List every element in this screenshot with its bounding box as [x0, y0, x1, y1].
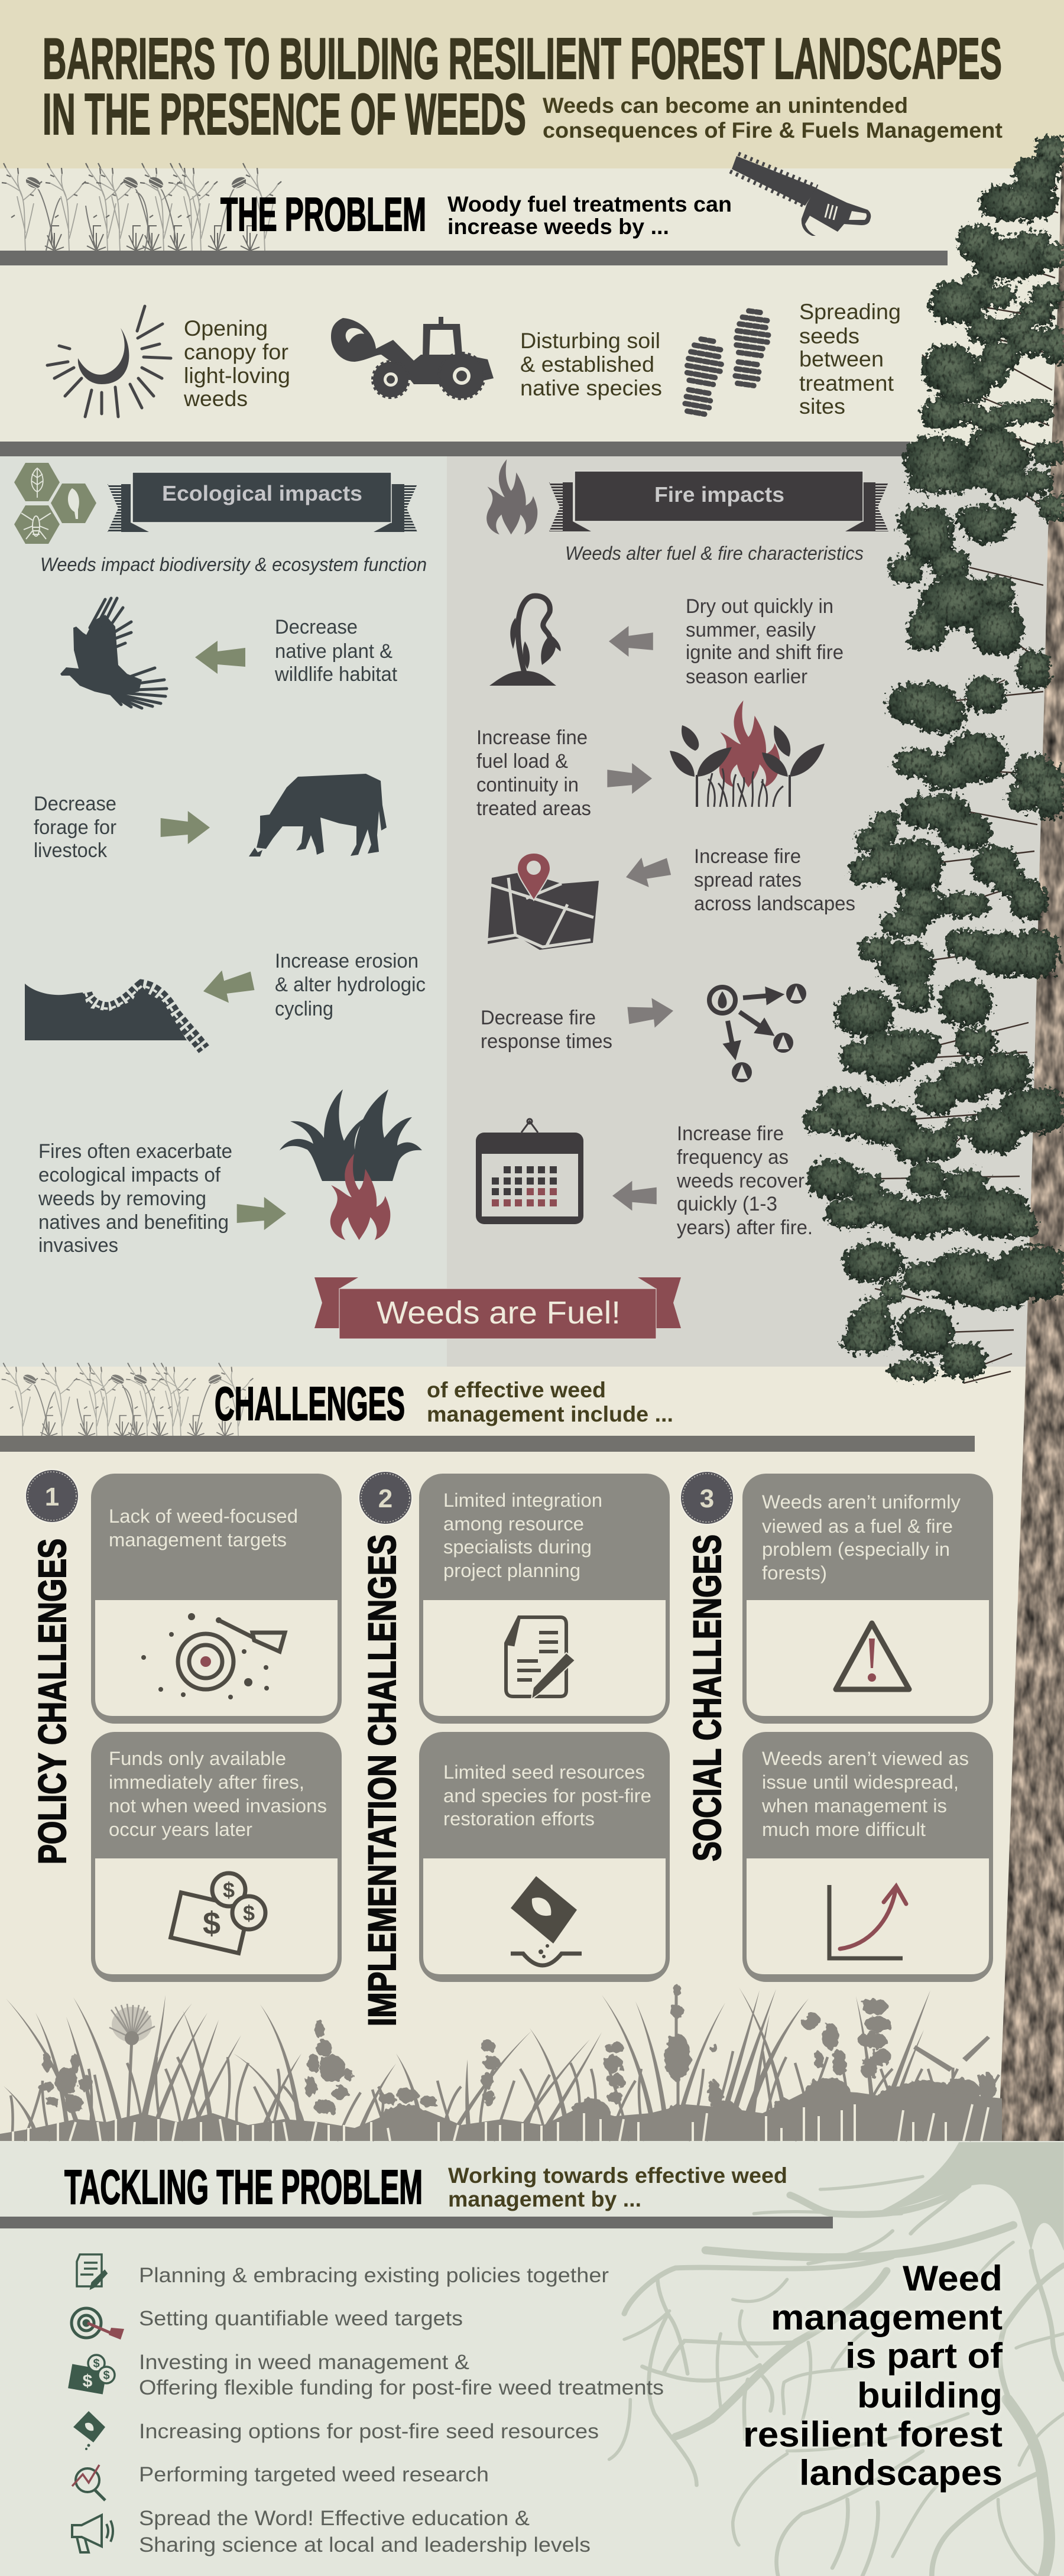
text: disturbing soil: native species	[520, 376, 662, 400]
icon: money: $	[243, 1901, 255, 1925]
arrow	[200, 965, 256, 1007]
icon: biodiversity hexagons	[14, 463, 96, 544]
tackling intro text: management by ...	[448, 2187, 641, 2211]
card: seed: Limited seed resources	[443, 1761, 645, 1783]
icon: money: $	[83, 2371, 93, 2391]
card: integration: specialists during	[443, 1536, 592, 1558]
number badge 1	[25, 1469, 79, 1523]
card: funding: not when weed invasions	[109, 1795, 327, 1816]
flowers	[38, 1985, 995, 2140]
icon: calendar	[476, 1119, 583, 1224]
column: implementation challenges	[359, 1471, 670, 2026]
tree: foliage	[809, 139, 1064, 1378]
icon: map with pin	[486, 853, 599, 950]
ribbon: weeds are fuel: Weeds are Fuel!	[377, 1295, 621, 1331]
column: social challenges	[680, 1471, 993, 1982]
icon: seed packet	[73, 2411, 105, 2450]
short blades	[11, 2051, 999, 2141]
text: fine fuel: fuel load &	[476, 750, 568, 773]
text: fine fuel	[476, 726, 591, 820]
card: integration: Limited integration	[443, 1490, 602, 1511]
divider bar	[0, 442, 910, 456]
card: funding	[91, 1732, 342, 1982]
panel: ecological impacts	[14, 463, 427, 1257]
tree roots	[609, 2142, 1064, 2576]
text: opening canopy: canopy for	[184, 340, 288, 364]
text: native habitat: Decrease	[275, 616, 358, 638]
icon: grazing cow	[249, 774, 387, 856]
text: response times: response times	[481, 1030, 612, 1053]
tree: branches	[845, 171, 1058, 1383]
text: fine fuel: Increase fine	[476, 726, 588, 749]
number badge 1: 1	[45, 1482, 59, 1511]
text: erosion: Increase erosion	[275, 950, 419, 972]
card: funding: immediately after fires,	[109, 1772, 304, 1793]
number badge 2: 2	[378, 1484, 392, 1513]
icon: plants and fire	[670, 700, 825, 807]
icon: sage grouse in flight	[60, 598, 167, 708]
icon: magnifier with trend	[72, 2465, 105, 2500]
arrow	[195, 641, 245, 674]
text: fire frequency: Increase fire	[677, 1122, 784, 1145]
icon: wilted plant	[489, 596, 561, 686]
card: perception: forests)	[762, 1562, 827, 1584]
card: perception	[742, 1474, 993, 1724]
icon: erosion hillside	[25, 984, 204, 1049]
ground silhouette	[0, 2090, 1002, 2141]
icon: fire network	[709, 984, 806, 1082]
column: policy challenges	[25, 1469, 342, 1982]
number badge 3: 3	[700, 1484, 714, 1513]
weed decoration: problem	[2, 163, 281, 251]
divider bar	[0, 1436, 975, 1452]
arrow	[607, 763, 652, 794]
ribbon: ecological impacts: Ecological impacts	[162, 481, 362, 505]
text: spreading seeds	[799, 300, 901, 418]
icon: money: $	[223, 1878, 235, 1902]
tackling intro text: Working towards effective weed	[448, 2163, 787, 2188]
icon: sun	[47, 306, 171, 417]
text: spreading seeds: treatment	[799, 371, 894, 395]
conclusion text: is part of	[845, 2336, 1003, 2376]
icon: chainsaw	[730, 154, 871, 236]
text: fire frequency: frequency as	[677, 1146, 789, 1169]
heading: challenges: CHALLENGES	[215, 1377, 405, 1430]
text: native habitat	[274, 616, 398, 686]
text: disturbing soil: Disturbing soil	[520, 329, 660, 353]
card: funding: occur years later	[109, 1819, 252, 1840]
arrow	[237, 1197, 286, 1230]
text: dry out: summer, easily	[686, 619, 816, 641]
ribbon: weeds are fuel	[314, 1277, 681, 1339]
item text: Planning & embracing existing policies together	[139, 2264, 609, 2287]
title	[43, 26, 1002, 147]
text: opening canopy: light-loving	[184, 364, 290, 388]
text: dry out: season earlier	[686, 666, 807, 688]
card: seed: restoration efforts	[443, 1808, 595, 1829]
arrow	[627, 996, 675, 1030]
card: seed: and species for post-fire	[443, 1785, 651, 1806]
card: perception: Weeds aren’t uniformly	[762, 1491, 961, 1513]
card: targets	[91, 1474, 342, 1724]
text: erosion	[275, 950, 426, 1020]
text: dry out: ignite and shift fire	[686, 641, 844, 664]
ground slits	[13, 2104, 988, 2141]
item text	[139, 2507, 591, 2556]
conclusion text	[743, 2259, 1003, 2493]
card: seed	[419, 1732, 670, 1982]
ribbon: ecological impacts	[108, 472, 417, 532]
problem intro text: Woody fuel treatments can	[447, 192, 732, 216]
thistle head	[109, 2004, 155, 2045]
text: disturbing soil	[520, 329, 662, 400]
card: widespread: much more difficult	[762, 1819, 926, 1840]
icon: money: $	[203, 1906, 220, 1941]
text: fire frequency: quickly (1-3	[677, 1193, 777, 1215]
challenges intro text: management include ...	[427, 1402, 673, 1426]
text: erosion: & alter hydrologic	[275, 974, 426, 996]
icon: money	[171, 1873, 265, 1953]
text: native habitat: native plant &	[275, 640, 392, 663]
text: spread rates: Increase fire	[694, 845, 801, 868]
vertical heading: social: SOCIAL CHALLENGES	[685, 1534, 729, 1861]
text: exacerbate: ecological impacts of	[38, 1164, 221, 1186]
arrow	[612, 1181, 657, 1211]
subtitle: fire: Weeds alter fuel & fire characteristics	[565, 543, 864, 564]
header background	[0, 0, 1064, 168]
text: exacerbate: natives and benefiting	[38, 1211, 229, 1234]
text: spreading seeds: Spreading	[799, 300, 901, 324]
text: fire frequency: weeds recover	[676, 1170, 805, 1192]
panel: fire impacts	[476, 459, 888, 1239]
arrow	[161, 811, 210, 844]
item text: Sharing science at local and leadership levels	[139, 2533, 591, 2556]
tree: trunk	[998, 142, 1064, 2141]
text: opening canopy	[183, 316, 290, 411]
icon: boot prints	[679, 310, 771, 416]
text: opening canopy: Opening	[184, 316, 268, 340]
conclusion text: landscapes	[799, 2453, 1003, 2493]
text: fine fuel: continuity in	[476, 774, 579, 796]
icon: flame	[330, 1154, 390, 1240]
arrow	[622, 852, 673, 892]
icon: weed tufts	[280, 1089, 422, 1181]
arrow	[609, 626, 653, 657]
icon: money	[69, 2355, 115, 2393]
card: targets: management targets	[109, 1529, 287, 1550]
text: spreading seeds: seeds	[799, 324, 859, 348]
text: spread rates: spread rates	[694, 869, 802, 891]
subtitle	[543, 93, 1003, 142]
fire panel background	[447, 456, 1064, 1367]
item text: Increasing options for post-fire seed resources	[139, 2420, 599, 2443]
item text: Offering flexible funding for post-fire weed treatments	[139, 2376, 664, 2399]
tackling section background	[0, 2141, 1064, 2576]
heading: the problem: THE PROBLEM	[220, 188, 426, 241]
number badge 3	[680, 1471, 734, 1524]
subtitle: Weeds can become an unintended	[543, 93, 908, 118]
icon: money: $	[93, 2357, 100, 2370]
text: forage: livestock	[34, 839, 108, 862]
icon: megaphone	[72, 2515, 113, 2552]
text: spread rates: across landscapes	[694, 893, 855, 915]
conclusion text: Weed	[903, 2259, 1003, 2298]
text: dry out	[686, 595, 844, 688]
vertical heading: policy: POLICY CHALLENGES	[30, 1539, 74, 1864]
icon: flame	[486, 459, 537, 534]
item text	[139, 2351, 664, 2399]
text: forage: forage for	[34, 816, 116, 839]
text: opening canopy: weeds	[183, 387, 248, 411]
vertical heading: implementation: IMPLEMENTATION CHALLENGES	[360, 1534, 404, 2026]
weed decoration: challenges	[2, 1363, 253, 1436]
icon: warning triangle	[836, 1623, 909, 1689]
card: widespread	[742, 1732, 993, 1982]
icon: target	[141, 1613, 285, 1699]
ecological panel background	[0, 456, 447, 1367]
card: integration: among resource	[443, 1513, 584, 1534]
divider bar	[0, 2217, 833, 2228]
icon: seed packet	[511, 1876, 582, 1965]
title: IN THE PRESENCE OF WEEDS	[43, 82, 526, 147]
card: targets: Lack of weed-focused	[109, 1506, 298, 1527]
card: integration	[419, 1474, 670, 1724]
text: response times	[481, 1007, 612, 1053]
problem intro text	[447, 192, 732, 239]
ribbon: fire impacts: Fire impacts	[654, 482, 784, 507]
card: widespread: Weeds aren’t viewed as	[762, 1748, 969, 1769]
text: fine fuel: treated areas	[476, 797, 591, 820]
grass blades	[4, 1987, 930, 2141]
card: funding: Funds only available	[109, 1748, 286, 1769]
icon: money: $	[103, 2369, 110, 2382]
challenges intro text: of effective weed	[427, 1378, 606, 1402]
subtitle: ecological: Weeds impact biodiversity & ecosystem function	[40, 554, 427, 575]
text: exacerbate	[38, 1140, 232, 1257]
number badge 2	[359, 1471, 412, 1524]
challenges section background	[0, 1367, 1064, 2141]
text: erosion: cycling	[275, 998, 333, 1020]
ribbon: fire impacts	[549, 471, 888, 531]
text: forage: Decrease	[34, 793, 116, 815]
item text: Setting quantifiable weed targets	[139, 2307, 463, 2330]
heading: tackling the problem: TACKLING THE PROBLEM	[64, 2160, 423, 2214]
icon: document and pencil	[506, 1617, 575, 1699]
text: exacerbate: weeds by removing	[38, 1188, 206, 1210]
icon: rising chart	[829, 1885, 906, 1958]
icon: target	[72, 2308, 124, 2340]
item text: Performing targeted weed research	[139, 2463, 489, 2486]
card: perception: problem (especially in	[762, 1539, 950, 1560]
action list	[69, 2254, 664, 2556]
text: spreading seeds: between	[799, 347, 884, 371]
conclusion text: management	[771, 2298, 1003, 2337]
card: perception: viewed as a fuel & fire	[762, 1516, 953, 1537]
icon: plan document	[77, 2254, 106, 2288]
text: native habitat: wildlife habitat	[274, 663, 398, 686]
text: exacerbate: invasives	[38, 1234, 118, 1257]
text: fire frequency	[676, 1122, 813, 1239]
item text: Investing in weed management &	[139, 2351, 469, 2374]
conclusion text: resilient forest	[743, 2415, 1003, 2454]
text: exacerbate: Fires often exacerbate	[38, 1140, 232, 1163]
text: forage	[34, 793, 116, 862]
text: dry out: Dry out quickly in	[686, 595, 833, 618]
item text: Spread the Word! Effective education &	[139, 2507, 530, 2530]
problem section background	[0, 168, 1064, 456]
text: fire frequency: years) after fire.	[677, 1216, 813, 1239]
card: widespread: issue until widespread,	[762, 1772, 959, 1793]
icon: loader tractor	[331, 317, 494, 398]
card: widespread: when management is	[761, 1795, 947, 1816]
card: integration: project planning	[443, 1560, 580, 1581]
text: spread rates	[694, 845, 855, 915]
problem intro text: increase weeds by ...	[447, 215, 669, 239]
tackling intro text	[448, 2163, 787, 2211]
subtitle: consequences of Fire & Fuels Management	[543, 118, 1003, 142]
conclusion text: building	[857, 2376, 1003, 2415]
challenges intro text	[427, 1378, 673, 1426]
text: spreading seeds: sites	[799, 394, 845, 418]
text: disturbing soil: & established	[520, 352, 654, 377]
text: response times: Decrease fire	[481, 1007, 596, 1029]
weed silhouette band	[0, 1985, 1002, 2141]
divider bar	[0, 251, 948, 265]
